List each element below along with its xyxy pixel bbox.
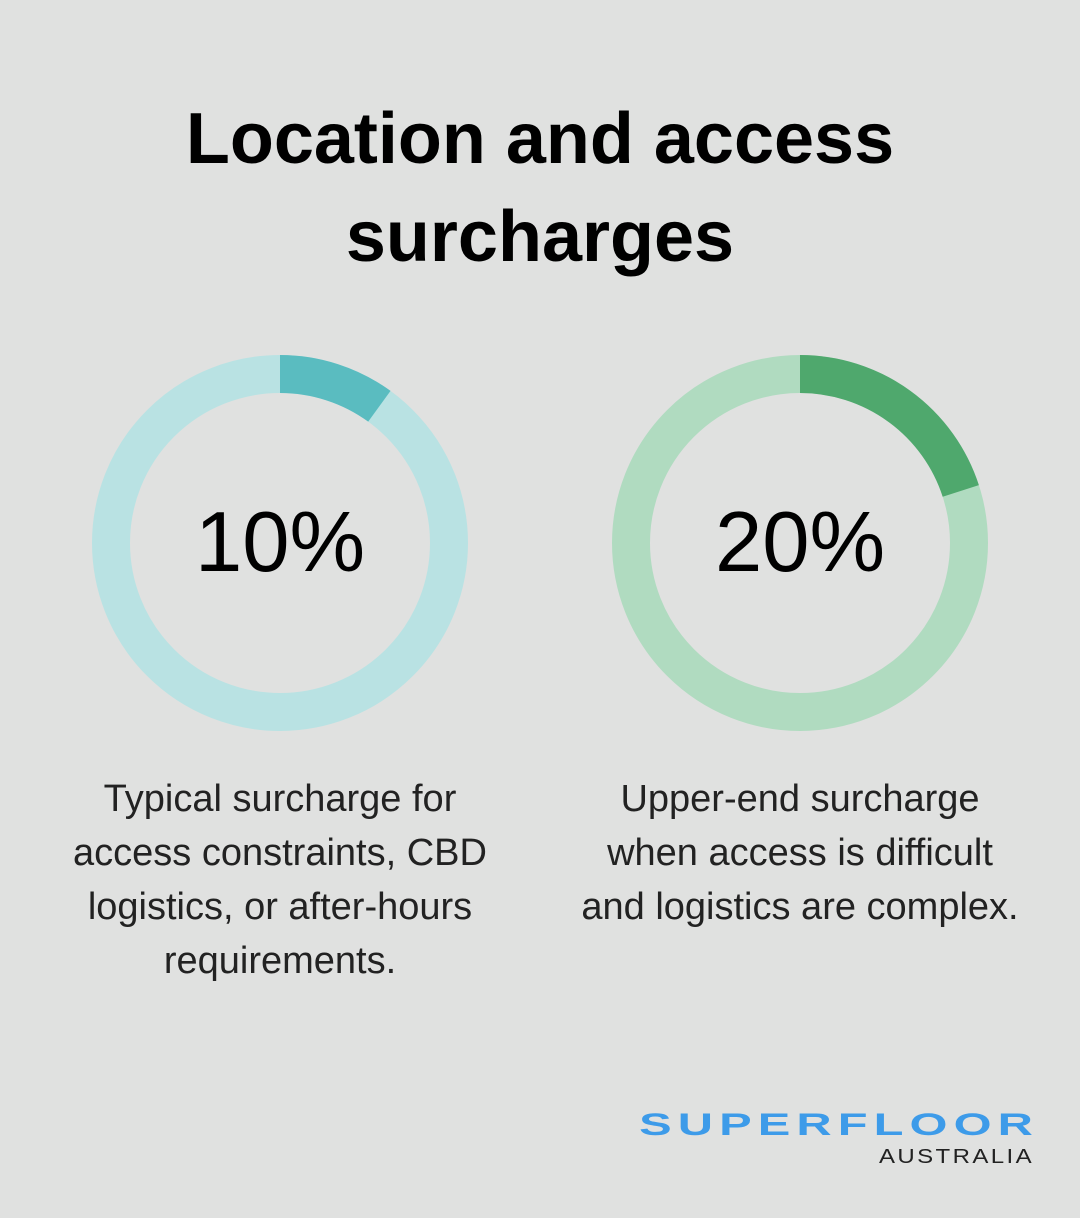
caption left: Typical surcharge for access constraints, CBD logistics, or after-hours requirements. [73,778,487,982]
caption right: when access is difficult [607,832,993,874]
title: Location and access [186,99,894,179]
caption right: Upper-end surcharge [620,778,980,820]
logo: SUPERFLOOR [639,1108,1039,1142]
donut: 10% [92,355,468,731]
donut: 20% [612,355,988,731]
logo: AUSTRALIA [879,1146,1034,1168]
logo [639,1108,1039,1168]
title: surcharges [346,197,734,277]
title [186,99,894,277]
caption right [581,778,1019,928]
caption right: and logistics are complex. [581,886,1019,928]
number: 20%: 20% [715,495,885,590]
number: 10%: 10% [195,495,365,590]
